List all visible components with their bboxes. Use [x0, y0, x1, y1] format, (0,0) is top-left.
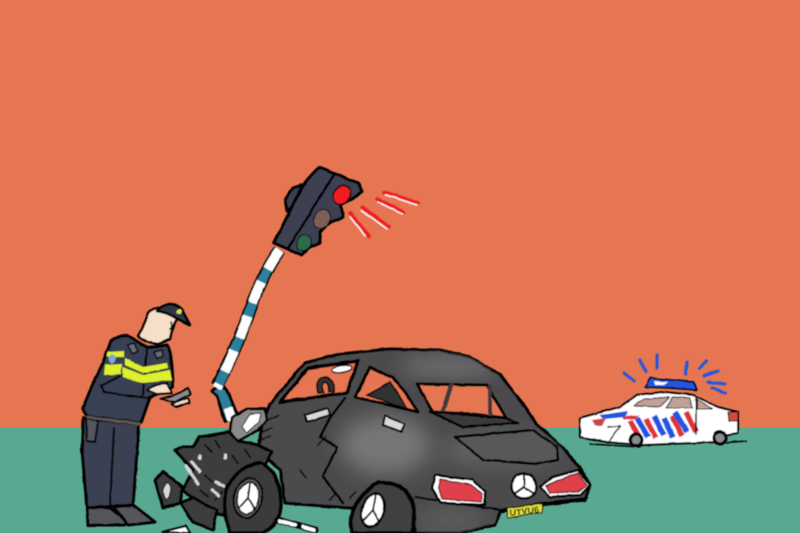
ground shadow	[590, 441, 746, 447]
green lamp, unlit	[294, 233, 314, 253]
traffic light pole	[212, 250, 280, 421]
traffic light	[274, 167, 362, 255]
reflective stripes	[104, 351, 172, 383]
notebook and hands	[147, 383, 172, 394]
mirror	[332, 364, 352, 374]
trunk panel	[455, 430, 558, 464]
door crack	[320, 398, 345, 503]
car wheels	[630, 434, 642, 446]
red light rays	[350, 192, 418, 236]
illustration	[82, 167, 746, 533]
crumpled hood	[175, 432, 272, 515]
holster	[86, 418, 98, 442]
right tail light	[540, 470, 590, 497]
car body	[580, 392, 738, 445]
broken pole on the ground	[278, 520, 315, 530]
left tail light	[432, 475, 485, 505]
side window	[355, 367, 418, 412]
broken bumper with headlight	[155, 472, 217, 530]
trousers	[82, 418, 139, 508]
door handles	[305, 408, 330, 422]
red lamp	[330, 182, 354, 208]
debris	[162, 526, 190, 533]
crumple highlights	[186, 455, 225, 496]
car body shell	[258, 349, 590, 533]
police officer	[82, 304, 190, 525]
blue flashing rays	[624, 355, 726, 393]
background: teal ground	[0, 428, 800, 533]
front wheel	[225, 463, 281, 533]
seats seen through windows	[317, 377, 407, 409]
rear wheel	[351, 482, 414, 533]
wrecked black car	[155, 349, 590, 533]
hood livery	[600, 411, 628, 419]
crumple hatching	[200, 416, 356, 500]
windshield	[280, 361, 358, 402]
rear window	[417, 384, 506, 418]
police car	[580, 355, 746, 447]
amber lamp, unlit	[310, 206, 334, 232]
car details	[728, 412, 738, 421]
left headlight	[230, 409, 267, 441]
shoes	[87, 507, 127, 525]
broken pole stripes	[280, 521, 314, 530]
livery stripes	[630, 412, 696, 438]
license plate: UTVU6	[509, 504, 540, 518]
car maker emblem	[512, 474, 536, 498]
head	[138, 308, 178, 344]
roof light bar	[645, 378, 697, 390]
car windows	[634, 397, 712, 409]
jacket	[83, 335, 173, 423]
rear bumper	[415, 497, 587, 510]
body shading highlights	[340, 357, 560, 530]
epaulettes and badge	[128, 343, 138, 354]
cap	[157, 304, 190, 325]
